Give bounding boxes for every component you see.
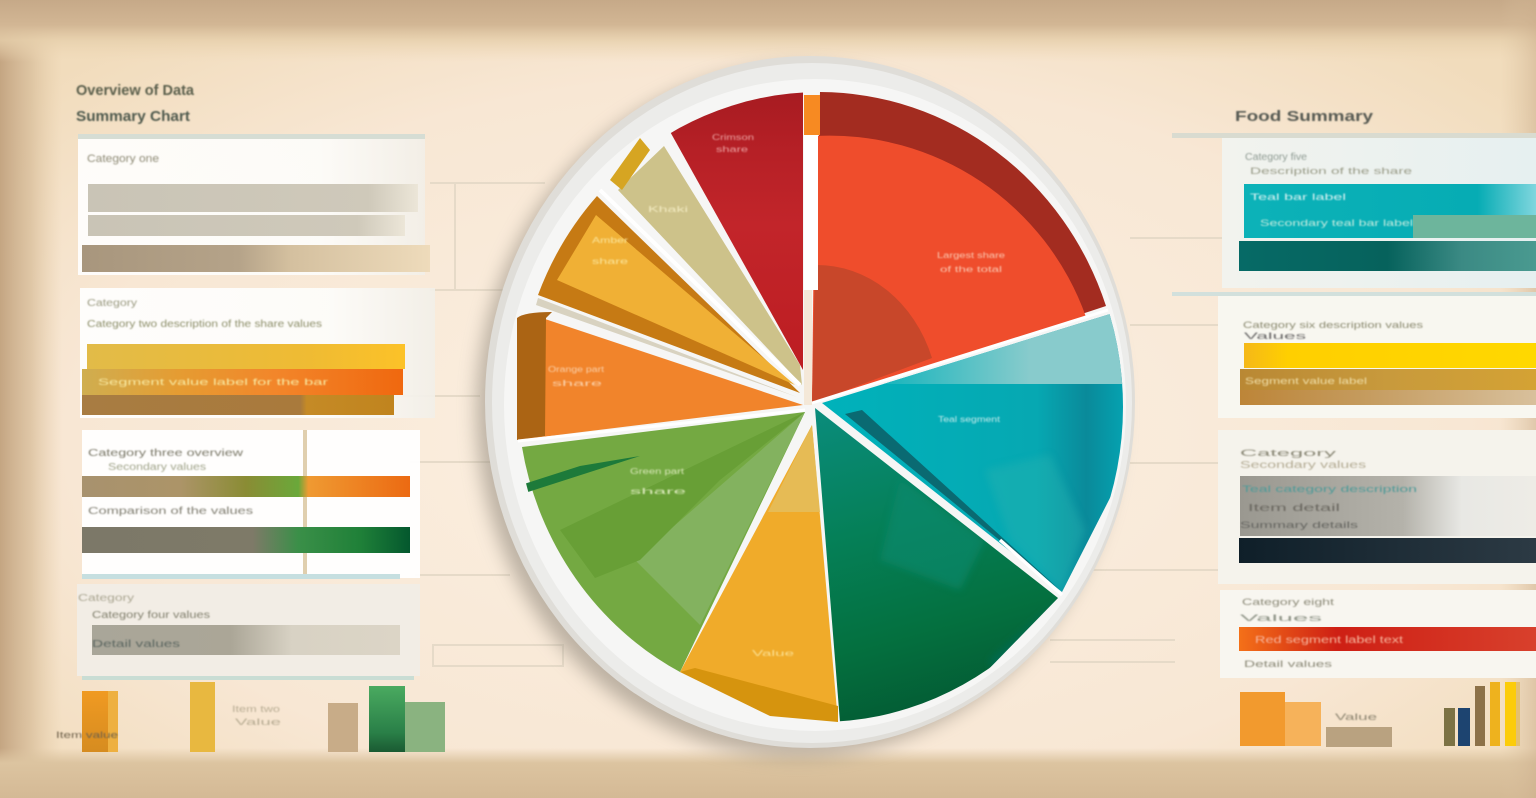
- panel: right 2: [1172, 292, 1536, 418]
- bar: right 2a: [1244, 343, 1536, 368]
- slice label: red: [937, 251, 1006, 274]
- bar: right 1a lower section: [1413, 215, 1536, 238]
- bar chart: left bottom: Value: [235, 717, 281, 727]
- slice tab: orange top: [804, 95, 820, 135]
- slice: light green: share: [630, 487, 688, 496]
- connector lines: [402, 183, 1222, 666]
- bar chart: left bottom: Item two: [232, 704, 280, 714]
- right heading: Food Summary: [1235, 108, 1374, 125]
- bar chart: right bottom left: Value: [1335, 712, 1377, 722]
- label: right 4c: Values: [1240, 613, 1323, 623]
- slice: khaki: [610, 138, 802, 385]
- label: left 1: Category one: [87, 153, 159, 165]
- slice: light green: Green part: [630, 467, 685, 476]
- left heading: [76, 82, 195, 125]
- bar: right 1a: [1244, 184, 1536, 238]
- label: right 3c: Teal category description: [1242, 484, 1417, 494]
- panel: left 1: [78, 134, 430, 275]
- panel: left 4: [77, 584, 420, 680]
- bar chart: left bottom: [56, 682, 445, 752]
- slice: orange: [517, 312, 803, 440]
- slice: khaki: Khaki: [648, 205, 688, 214]
- label: left 3c: Comparison of the values: [88, 506, 253, 517]
- bar: left 1a: [88, 184, 418, 212]
- slice label: red: of the total: [940, 265, 1002, 274]
- label: left 4a: Category four values: [92, 610, 210, 621]
- bar: left 2c: [82, 395, 394, 415]
- label: right 3e: Summary details: [1240, 520, 1359, 530]
- label: left 3b: Secondary values: [108, 462, 206, 473]
- slice: crimson: [668, 80, 803, 370]
- bar chart: right bottom left: [1240, 692, 1392, 747]
- bar text: right 2: Segment value label: [1245, 376, 1367, 386]
- slice: orange: share: [552, 379, 603, 388]
- divider: vertical white: [804, 135, 818, 290]
- slice: teal: Teal segment: [938, 415, 1001, 424]
- bar: right 4: [1239, 627, 1536, 651]
- bar: right 1b: [1239, 241, 1536, 271]
- slice: amber: Amber: [592, 236, 629, 245]
- bar: left 2b: [82, 369, 403, 395]
- bar: left 3b: [82, 527, 410, 553]
- label: right 1b: Description of the share: [1250, 166, 1412, 176]
- slice: amber: [536, 196, 800, 397]
- bar text: right 1b: Secondary teal bar label: [1260, 218, 1413, 228]
- panel: right 3: [1218, 430, 1536, 584]
- panel: right 4: [1220, 590, 1536, 678]
- slice: crimson: Crimson: [712, 133, 754, 142]
- bar: left 1c: [82, 245, 430, 272]
- divider: left 3: [303, 430, 307, 574]
- bar: left 2a: [87, 344, 405, 369]
- label: right 3a: Category: [1240, 448, 1337, 458]
- pie chart: [517, 80, 1130, 740]
- bar chart: right bottom right: [1444, 682, 1520, 746]
- label: left 2a: Category: [87, 298, 137, 309]
- pie ring: [476, 56, 1135, 757]
- bar: right 3c: [1239, 538, 1536, 563]
- slice: teal: [822, 314, 1123, 592]
- label: right 2b: Values: [1244, 331, 1307, 341]
- bar text: left 2: Segment value label for the bar: [98, 377, 328, 387]
- rule: left 3: [82, 574, 400, 579]
- label: right 3d: Item detail: [1248, 503, 1340, 514]
- rule: left 4: [82, 676, 414, 680]
- bar: left 3a: [82, 476, 410, 497]
- bar: right 3b: [1240, 476, 1536, 536]
- label: left 2b: Category two description of the share values: [87, 319, 322, 330]
- bar: right 2c: [1240, 390, 1536, 405]
- label: right 1a: Category five: [1245, 152, 1307, 163]
- label: left 3a: Category three overview: [88, 448, 244, 459]
- slice: yellow: Value: [752, 649, 795, 658]
- slice: amber: share: [592, 257, 629, 266]
- label: right 4b: Detail values: [1244, 659, 1333, 669]
- slice: light green: [522, 412, 805, 672]
- panel: left 3: [82, 430, 420, 579]
- left heading: Summary Chart: [76, 108, 190, 125]
- label: right 2a: Category six description values: [1243, 320, 1424, 330]
- left heading: Overview of Data: [76, 82, 195, 99]
- panel: left 2: [80, 288, 435, 418]
- bar text: right 1a: Teal bar label: [1250, 192, 1346, 202]
- bar: left 4: [92, 625, 400, 655]
- label: right 4a: Category eight: [1242, 597, 1335, 607]
- bar: right 2b: [1240, 369, 1536, 390]
- slice: dark green: [815, 408, 1058, 722]
- slice label: red: Largest share: [937, 251, 1006, 260]
- slice gaps: [518, 190, 1108, 595]
- slice: yellow: [680, 425, 838, 722]
- label: left 4b: Detail values: [92, 639, 180, 650]
- bar text: right 4: Red segment label text: [1255, 635, 1403, 646]
- slice: red: [812, 92, 1106, 403]
- bar chart: left bottom: Item value: [56, 730, 118, 740]
- slice: orange: Orange part: [548, 365, 605, 374]
- label: left 4c: Category: [78, 593, 134, 604]
- slice: crimson: share: [716, 145, 749, 154]
- bar: left 1b: [88, 215, 405, 236]
- panel: right 1: [1172, 133, 1536, 288]
- label: right 3b: Secondary values: [1240, 460, 1366, 471]
